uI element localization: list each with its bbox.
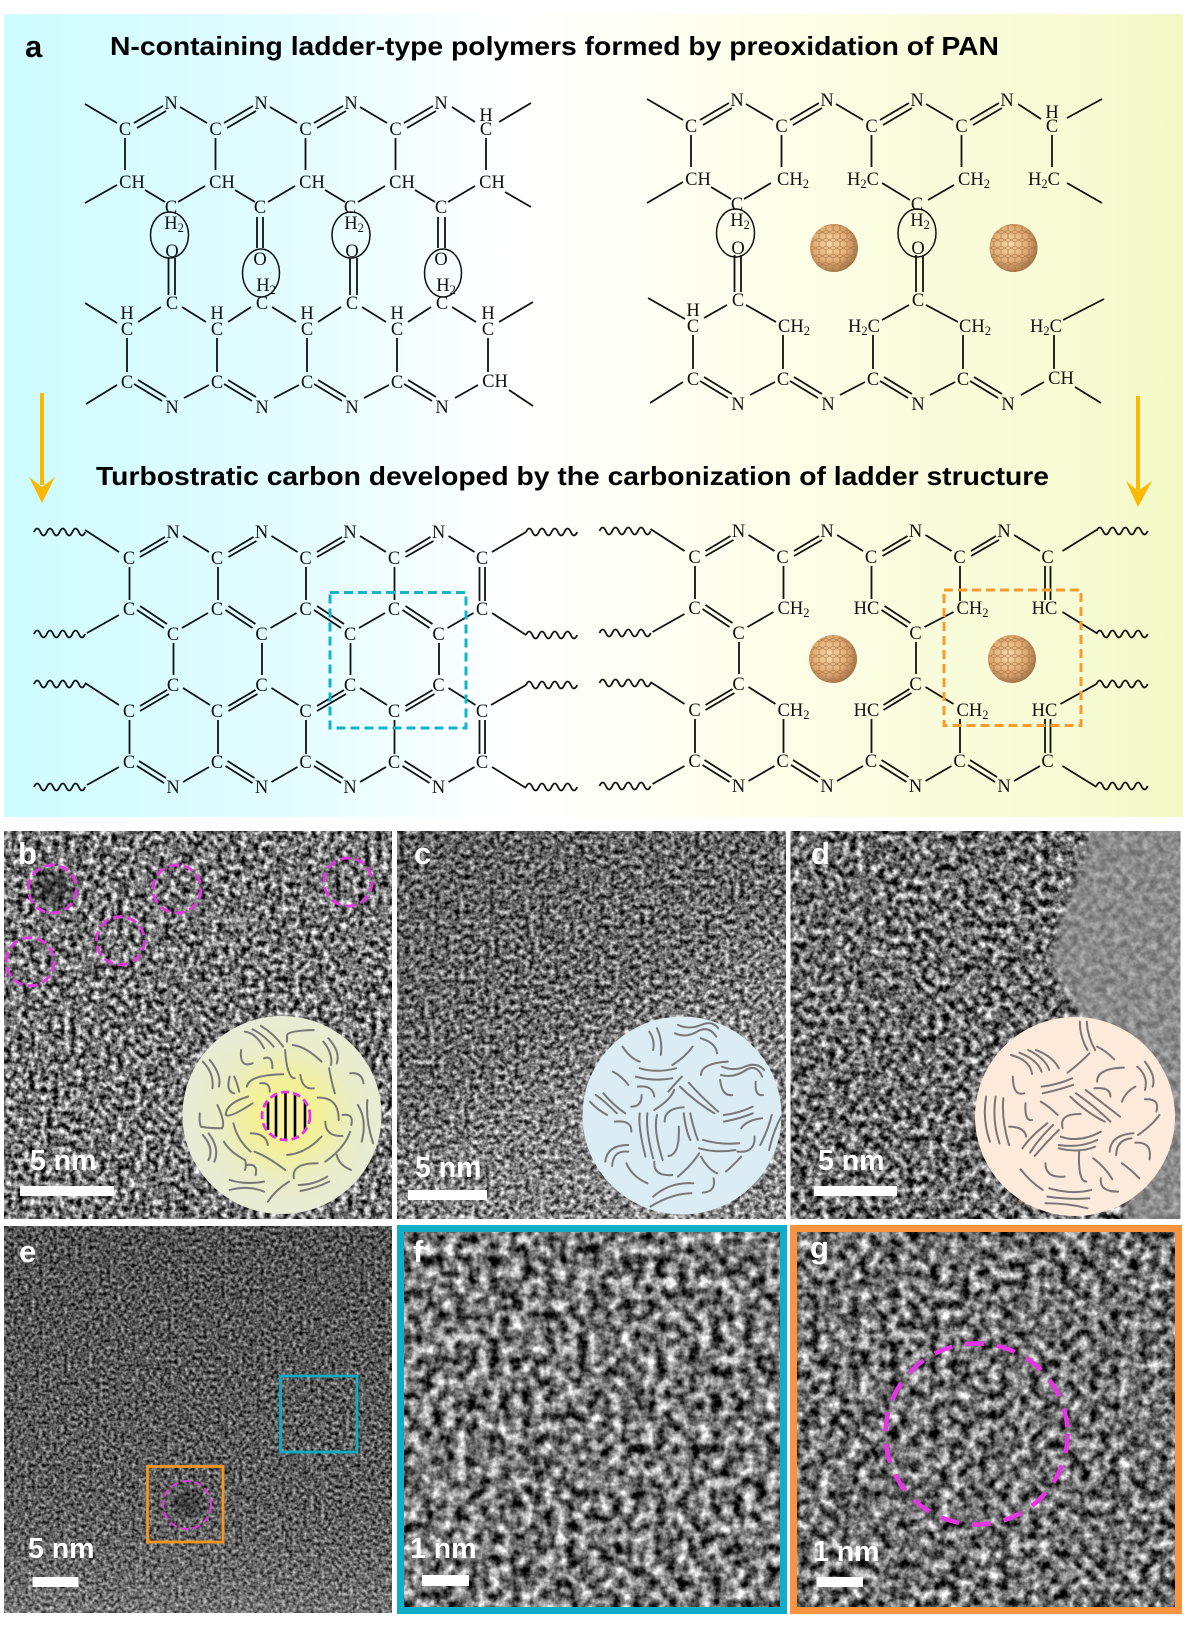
schematic inset: nanocrystal in amorphous carbon bbox=[182, 1016, 382, 1214]
structure: ladder polymer with nanoparticles: C bbox=[867, 370, 879, 390]
region box f in teal bbox=[280, 1376, 357, 1452]
structure: turbostratic carbon with nanoparticles: N bbox=[732, 522, 745, 542]
structure: ladder polymer without nanoparticles: C bbox=[254, 198, 266, 218]
scale bar c: 5 nm bbox=[415, 1152, 482, 1184]
panel label b: b bbox=[18, 836, 37, 871]
structure: ladder polymer without nanoparticles: CH bbox=[389, 173, 415, 193]
structure: ladder polymer with nanoparticles: N bbox=[1000, 91, 1014, 111]
structure: turbostratic carbon with nanoparticles: HC bbox=[854, 599, 879, 619]
structure: ladder polymer with nanoparticles: C bbox=[957, 370, 969, 390]
structure: turbostratic carbon without nanoparticles: C bbox=[476, 753, 488, 773]
structure: ladder polymer without nanoparticles: C bbox=[344, 198, 356, 218]
structure: turbostratic carbon without nanoparticles: C bbox=[167, 676, 179, 696]
structure: ladder polymer with nanoparticles: H bbox=[910, 211, 924, 231]
scale bar d bbox=[814, 1145, 897, 1196]
structure: ladder polymer without nanoparticles: H bbox=[344, 214, 358, 234]
structure: turbostratic carbon without nanoparticles: N bbox=[343, 523, 357, 543]
structure: turbostratic carbon with nanoparticles: 2 bbox=[982, 606, 988, 620]
structure: ladder polymer without nanoparticles: O bbox=[165, 242, 179, 262]
structure: ladder polymer with nanoparticles: N bbox=[1001, 395, 1015, 415]
structure: ladder polymer without nanoparticles: O bbox=[253, 250, 267, 270]
structure: ladder polymer with nanoparticles: C bbox=[1046, 117, 1058, 137]
heading: ladder-type polymers: N-containing ladder-type polymers formed by preoxidation of PAN bbox=[110, 31, 999, 61]
structure: ladder polymer with nanoparticles: N bbox=[911, 395, 925, 415]
structure: turbostratic carbon without nanoparticles: C bbox=[388, 549, 400, 569]
structure: ladder polymer with nanoparticles: O bbox=[731, 239, 745, 259]
structure: ladder polymer without nanoparticles: H bbox=[300, 304, 314, 324]
structure: ladder polymer with nanoparticles bbox=[647, 91, 1104, 415]
structure: ladder polymer with nanoparticles: CH bbox=[778, 317, 804, 337]
structure: ladder polymer with nanoparticles: H bbox=[847, 170, 860, 190]
structure: turbostratic carbon with nanoparticles: C bbox=[776, 752, 789, 772]
structure: turbostratic carbon with nanoparticles: C bbox=[688, 701, 701, 721]
structure: ladder polymer without nanoparticles: C bbox=[391, 320, 403, 340]
structure: ladder polymer with nanoparticles: N bbox=[731, 395, 745, 415]
structure: ladder polymer without nanoparticles: C bbox=[211, 320, 223, 340]
structure: ladder polymer with nanoparticles: C bbox=[955, 117, 968, 137]
structure: turbostratic carbon with nanoparticles: C bbox=[865, 752, 877, 772]
heading: turbostratic carbon: Turbostratic carbon developed by the carbonization of ladder structure bbox=[96, 461, 1049, 491]
structure: turbostratic carbon with nanoparticles: C bbox=[688, 548, 701, 568]
structure: ladder polymer with nanoparticles: C bbox=[867, 170, 879, 190]
arrow: left preoxidation to carbonization bbox=[29, 393, 55, 503]
structure: turbostratic carbon with nanoparticles: 2 bbox=[803, 708, 809, 722]
structure: ladder polymer with nanoparticles: H bbox=[848, 317, 861, 337]
structure: turbostratic carbon with nanoparticles: C bbox=[732, 675, 745, 695]
structure: turbostratic carbon without nanoparticles: N bbox=[255, 778, 268, 798]
panel b: TEM image with schematic inset bbox=[4, 831, 392, 1219]
structure: ladder polymer with nanoparticles: H bbox=[1045, 103, 1059, 123]
structure: ladder polymer without nanoparticles: 2 bbox=[358, 221, 364, 235]
structure: ladder polymer with nanoparticles: C bbox=[865, 117, 878, 137]
structure: ladder polymer with nanoparticles: N bbox=[730, 91, 744, 111]
structure: ladder polymer without nanoparticles: N bbox=[165, 398, 179, 418]
structure: turbostratic carbon without nanoparticles: C bbox=[344, 676, 356, 696]
structure: turbostratic carbon without nanoparticles: C bbox=[211, 600, 223, 620]
structure: ladder polymer without nanoparticles: H bbox=[479, 106, 493, 126]
structure: turbostratic carbon with nanoparticles bbox=[600, 522, 1148, 797]
nanocrystal dashed circle bbox=[886, 1344, 1068, 1524]
structure: ladder polymer with nanoparticles: CH bbox=[958, 170, 984, 190]
structure: ladder polymer with nanoparticles: N bbox=[821, 395, 835, 415]
structure: turbostratic carbon without nanoparticles: C bbox=[255, 625, 268, 645]
structure: turbostratic carbon without nanoparticles: C bbox=[388, 600, 400, 620]
structure: turbostratic carbon with nanoparticles: N bbox=[909, 522, 922, 542]
structure: ladder polymer without nanoparticles: CH bbox=[209, 173, 235, 193]
structure: turbostratic carbon with nanoparticles: 2 bbox=[803, 606, 809, 620]
structure: turbostratic carbon with nanoparticles: C bbox=[688, 752, 701, 772]
structure: turbostratic carbon without nanoparticles: C bbox=[299, 600, 312, 620]
panel label a: a bbox=[25, 29, 43, 64]
scale bar e: 5 nm bbox=[28, 1533, 95, 1565]
structure: ladder polymer without nanoparticles: N bbox=[255, 398, 269, 418]
structure: turbostratic carbon without nanoparticles: N bbox=[255, 523, 268, 543]
structure: turbostratic carbon without nanoparticles bbox=[34, 523, 577, 798]
structure: turbostratic carbon with nanoparticles: C bbox=[688, 599, 701, 619]
structure: turbostratic carbon without nanoparticles: C bbox=[123, 753, 135, 773]
structure: turbostratic carbon with nanoparticles: HC bbox=[1032, 599, 1057, 619]
structure: ladder polymer with nanoparticles: C bbox=[777, 370, 789, 390]
structure: turbostratic carbon with nanoparticles: C bbox=[732, 624, 745, 644]
structure: ladder polymer with nanoparticles: C bbox=[731, 195, 743, 215]
structure: ladder polymer without nanoparticles: C bbox=[482, 320, 494, 340]
scale bar b bbox=[20, 1145, 114, 1196]
structure: turbostratic carbon with nanoparticles: HC bbox=[1032, 701, 1057, 721]
structure: ladder polymer without nanoparticles: H bbox=[120, 304, 134, 324]
structure: ladder polymer without nanoparticles: N bbox=[164, 94, 178, 114]
structure: ladder polymer without nanoparticles: C bbox=[346, 294, 358, 314]
structure: turbostratic carbon with nanoparticles: CH bbox=[956, 599, 982, 619]
structure: ladder polymer without nanoparticles: C bbox=[436, 294, 448, 314]
structure: ladder polymer without nanoparticles: C bbox=[119, 120, 131, 140]
structure: ladder polymer without nanoparticles: C bbox=[211, 373, 223, 393]
region box g in orange with nanocrystal bbox=[148, 1466, 223, 1542]
panel e: low-magnification TEM image bbox=[4, 1226, 392, 1613]
structure: ladder polymer with nanoparticles: H bbox=[686, 301, 700, 321]
panel f: high-resolution TEM, teal frame bbox=[400, 1228, 784, 1610]
structure: turbostratic carbon with nanoparticles: C bbox=[865, 548, 877, 568]
structure: ladder polymer with nanoparticles: 2 bbox=[924, 218, 930, 232]
structure: turbostratic carbon with nanoparticles: C bbox=[909, 624, 922, 644]
scale bar e bbox=[28, 1533, 95, 1587]
panel a background gradient bbox=[4, 14, 1183, 817]
structure: ladder polymer with nanoparticles: H bbox=[1028, 170, 1041, 190]
structure: turbostratic carbon with nanoparticles: CH bbox=[956, 701, 982, 721]
scale bar g bbox=[813, 1536, 880, 1587]
structure: ladder polymer without nanoparticles: 2 bbox=[270, 283, 276, 297]
structure: ladder polymer with nanoparticles: CH bbox=[685, 170, 711, 190]
structure: ladder polymer without nanoparticles: CH bbox=[479, 173, 505, 193]
structure: turbostratic carbon without nanoparticles: C bbox=[432, 676, 445, 696]
structure: ladder polymer with nanoparticles: 2 bbox=[984, 177, 990, 191]
structure: turbostratic carbon with nanoparticles: N bbox=[732, 777, 745, 797]
structure: ladder polymer with nanoparticles: H bbox=[730, 211, 744, 231]
structure: ladder polymer without nanoparticles: CH bbox=[482, 372, 508, 392]
structure: ladder polymer with nanoparticles: CH bbox=[1048, 369, 1074, 389]
structure: ladder polymer with nanoparticles: C bbox=[911, 195, 923, 215]
callout: orange dashed box on region g bbox=[944, 590, 1081, 726]
structure: turbostratic carbon without nanoparticles: C bbox=[388, 702, 400, 722]
structure: ladder polymer without nanoparticles: H bbox=[256, 276, 270, 296]
structure: turbostratic carbon with nanoparticles: C bbox=[1041, 752, 1054, 772]
structure: turbostratic carbon with nanoparticles: 2 bbox=[982, 708, 988, 722]
icon: nanoparticle in carbon, right bbox=[988, 635, 1036, 683]
structure: ladder polymer without nanoparticles: C bbox=[301, 373, 313, 393]
structure: ladder polymer with nanoparticles: N bbox=[820, 91, 834, 111]
structure: turbostratic carbon with nanoparticles: CH bbox=[778, 599, 803, 619]
structure: ladder polymer with nanoparticles: N bbox=[910, 91, 924, 111]
structure: turbostratic carbon without nanoparticles: C bbox=[299, 753, 312, 773]
structure: ladder polymer with nanoparticles: C bbox=[912, 291, 924, 311]
structure: turbostratic carbon without nanoparticles: C bbox=[255, 676, 268, 696]
structure: ladder polymer with nanoparticles: 2 bbox=[1043, 324, 1050, 338]
structure: turbostratic carbon with nanoparticles: CH bbox=[778, 701, 803, 721]
structure: turbostratic carbon without nanoparticles: C bbox=[211, 702, 223, 722]
structure: turbostratic carbon without nanoparticles: N bbox=[432, 778, 445, 798]
nanocrystal dashed circles bbox=[6, 858, 372, 986]
icon: nanoparticle in polymer, right bbox=[990, 224, 1038, 272]
structure: turbostratic carbon without nanoparticles: N bbox=[343, 778, 357, 798]
callout: teal dashed box on region f bbox=[330, 592, 466, 728]
panel label c: c bbox=[414, 836, 431, 871]
structure: ladder polymer with nanoparticles: C bbox=[687, 317, 699, 337]
structure: turbostratic carbon without nanoparticles: C bbox=[344, 625, 356, 645]
structure: turbostratic carbon with nanoparticles: N bbox=[820, 522, 834, 542]
panel d: TEM image with schematic inset bbox=[790, 831, 1180, 1219]
structure: ladder polymer with nanoparticles: O bbox=[911, 239, 925, 259]
structure: turbostratic carbon with nanoparticles: HC bbox=[854, 701, 879, 721]
lighter low-contrast region of panel d bbox=[1044, 831, 1180, 1219]
panel a: reaction scheme bbox=[4, 14, 1183, 817]
panel label f: f bbox=[413, 1234, 424, 1269]
structure: ladder polymer without nanoparticles: C bbox=[480, 120, 492, 140]
structure: ladder polymer without nanoparticles: C bbox=[121, 373, 133, 393]
structure: ladder polymer without nanoparticles: H bbox=[481, 304, 495, 324]
structure: ladder polymer with nanoparticles: 2 bbox=[1041, 177, 1048, 191]
scale bar d: 5 nm bbox=[818, 1145, 885, 1177]
structure: ladder polymer with nanoparticles: 2 bbox=[985, 324, 991, 338]
structure: turbostratic carbon without nanoparticles: C bbox=[123, 549, 135, 569]
nanocrystal core with lattice fringes bbox=[262, 1092, 310, 1140]
scale bar c bbox=[408, 1152, 487, 1200]
structure: ladder polymer without nanoparticles: H bbox=[390, 304, 404, 324]
structure: ladder polymer without nanoparticles bbox=[85, 94, 533, 418]
structure: ladder polymer without nanoparticles: C bbox=[299, 120, 312, 140]
structure: turbostratic carbon without nanoparticles: C bbox=[299, 549, 312, 569]
scale bar f bbox=[410, 1533, 477, 1586]
structure: ladder polymer without nanoparticles: H bbox=[164, 214, 178, 234]
structure: ladder polymer without nanoparticles: H bbox=[210, 304, 224, 324]
structure: turbostratic carbon without nanoparticles: N bbox=[432, 523, 445, 543]
structure: ladder polymer without nanoparticles: N bbox=[344, 94, 358, 114]
structure: turbostratic carbon without nanoparticles: C bbox=[476, 549, 488, 569]
schematic inset: turbostratic carbon, peach bbox=[975, 1017, 1175, 1216]
structure: ladder polymer without nanoparticles: C bbox=[435, 198, 447, 218]
structure: turbostratic carbon without nanoparticles: C bbox=[123, 702, 135, 722]
panel g: high-resolution TEM, orange frame bbox=[794, 1228, 1178, 1610]
structure: ladder polymer with nanoparticles: C bbox=[1050, 317, 1062, 337]
structure: turbostratic carbon with nanoparticles: N bbox=[997, 777, 1011, 797]
structure: ladder polymer without nanoparticles: N bbox=[434, 94, 448, 114]
structure: ladder polymer without nanoparticles: C bbox=[121, 320, 133, 340]
structure: ladder polymer with nanoparticles: 2 bbox=[804, 324, 810, 338]
structure: ladder polymer without nanoparticles: 2 bbox=[450, 283, 456, 297]
structure: turbostratic carbon with nanoparticles: C bbox=[909, 675, 922, 695]
structure: ladder polymer with nanoparticles: 2 bbox=[861, 324, 868, 338]
structure: turbostratic carbon without nanoparticles: C bbox=[299, 702, 312, 722]
structure: turbostratic carbon without nanoparticles: C bbox=[167, 625, 179, 645]
structure: ladder polymer without nanoparticles: C bbox=[209, 120, 222, 140]
structure: ladder polymer with nanoparticles: C bbox=[775, 117, 788, 137]
structure: turbostratic carbon without nanoparticles: C bbox=[388, 753, 400, 773]
structure: ladder polymer without nanoparticles: C bbox=[166, 294, 178, 314]
structure: ladder polymer with nanoparticles: C bbox=[868, 317, 880, 337]
structure: turbostratic carbon with nanoparticles: C bbox=[953, 548, 966, 568]
structure: ladder polymer without nanoparticles: C bbox=[165, 198, 177, 218]
structure: ladder polymer without nanoparticles: CH bbox=[119, 173, 145, 193]
structure: ladder polymer with nanoparticles: 2 bbox=[803, 177, 809, 191]
panel label g: g bbox=[810, 1230, 829, 1265]
structure: turbostratic carbon without nanoparticles: C bbox=[211, 549, 223, 569]
structure: ladder polymer with nanoparticles: CH bbox=[777, 170, 803, 190]
structure: ladder polymer with nanoparticles: H bbox=[1030, 317, 1043, 337]
structure: ladder polymer with nanoparticles: CH bbox=[959, 317, 985, 337]
structure: ladder polymer without nanoparticles: C bbox=[389, 120, 402, 140]
scale bar f: 1 nm bbox=[410, 1533, 477, 1565]
icon: nanoparticle in carbon, left bbox=[809, 635, 857, 683]
structure: ladder polymer without nanoparticles: C bbox=[301, 320, 313, 340]
structure: turbostratic carbon without nanoparticles: C bbox=[476, 702, 488, 722]
structure: ladder polymer without nanoparticles: 2 bbox=[178, 221, 184, 235]
panel label d: d bbox=[811, 836, 830, 871]
scale bar b: 5 nm bbox=[30, 1145, 97, 1177]
structure: ladder polymer without nanoparticles: C bbox=[256, 294, 268, 314]
structure: ladder polymer with nanoparticles: C bbox=[685, 117, 697, 137]
structure: ladder polymer with nanoparticles: C bbox=[1048, 170, 1060, 190]
structure: ladder polymer without nanoparticles: O bbox=[434, 250, 448, 270]
structure: turbostratic carbon without nanoparticles: N bbox=[166, 523, 180, 543]
structure: turbostratic carbon with nanoparticles: C bbox=[953, 752, 966, 772]
structure: ladder polymer with nanoparticles: C bbox=[687, 370, 699, 390]
structure: turbostratic carbon with nanoparticles: C bbox=[1041, 548, 1054, 568]
structure: ladder polymer with nanoparticles: C bbox=[732, 291, 744, 311]
structure: turbostratic carbon with nanoparticles: C bbox=[776, 548, 789, 568]
structure: ladder polymer with nanoparticles: 2 bbox=[744, 218, 750, 232]
structure: ladder polymer without nanoparticles: N bbox=[254, 94, 268, 114]
structure: ladder polymer without nanoparticles: N bbox=[435, 398, 449, 418]
structure: turbostratic carbon with nanoparticles: N bbox=[909, 777, 922, 797]
structure: ladder polymer without nanoparticles: C bbox=[391, 373, 403, 393]
structure: ladder polymer with nanoparticles: 2 bbox=[860, 177, 867, 191]
structure: turbostratic carbon without nanoparticles: C bbox=[123, 600, 135, 620]
structure: ladder polymer without nanoparticles: O bbox=[345, 242, 359, 262]
structure: turbostratic carbon with nanoparticles: N bbox=[997, 522, 1011, 542]
structure: turbostratic carbon without nanoparticles: C bbox=[476, 600, 488, 620]
structure: ladder polymer without nanoparticles: H bbox=[436, 276, 450, 296]
scale bar g: 1 nm bbox=[813, 1536, 880, 1568]
panel c: TEM image with schematic inset bbox=[397, 831, 786, 1219]
arrow: right preoxidation to carbonization bbox=[1126, 396, 1152, 507]
structure: turbostratic carbon without nanoparticles: N bbox=[166, 778, 180, 798]
structure: ladder polymer without nanoparticles: N bbox=[345, 398, 359, 418]
schematic inset: turbostratic carbon, blue bbox=[582, 1016, 782, 1214]
structure: turbostratic carbon without nanoparticles: C bbox=[432, 625, 445, 645]
icon: nanoparticle in polymer, left bbox=[810, 224, 858, 272]
panel label e: e bbox=[19, 1234, 36, 1269]
structure: ladder polymer without nanoparticles: CH bbox=[299, 173, 325, 193]
structure: turbostratic carbon without nanoparticles: C bbox=[211, 753, 223, 773]
structure: turbostratic carbon with nanoparticles: N bbox=[820, 777, 834, 797]
